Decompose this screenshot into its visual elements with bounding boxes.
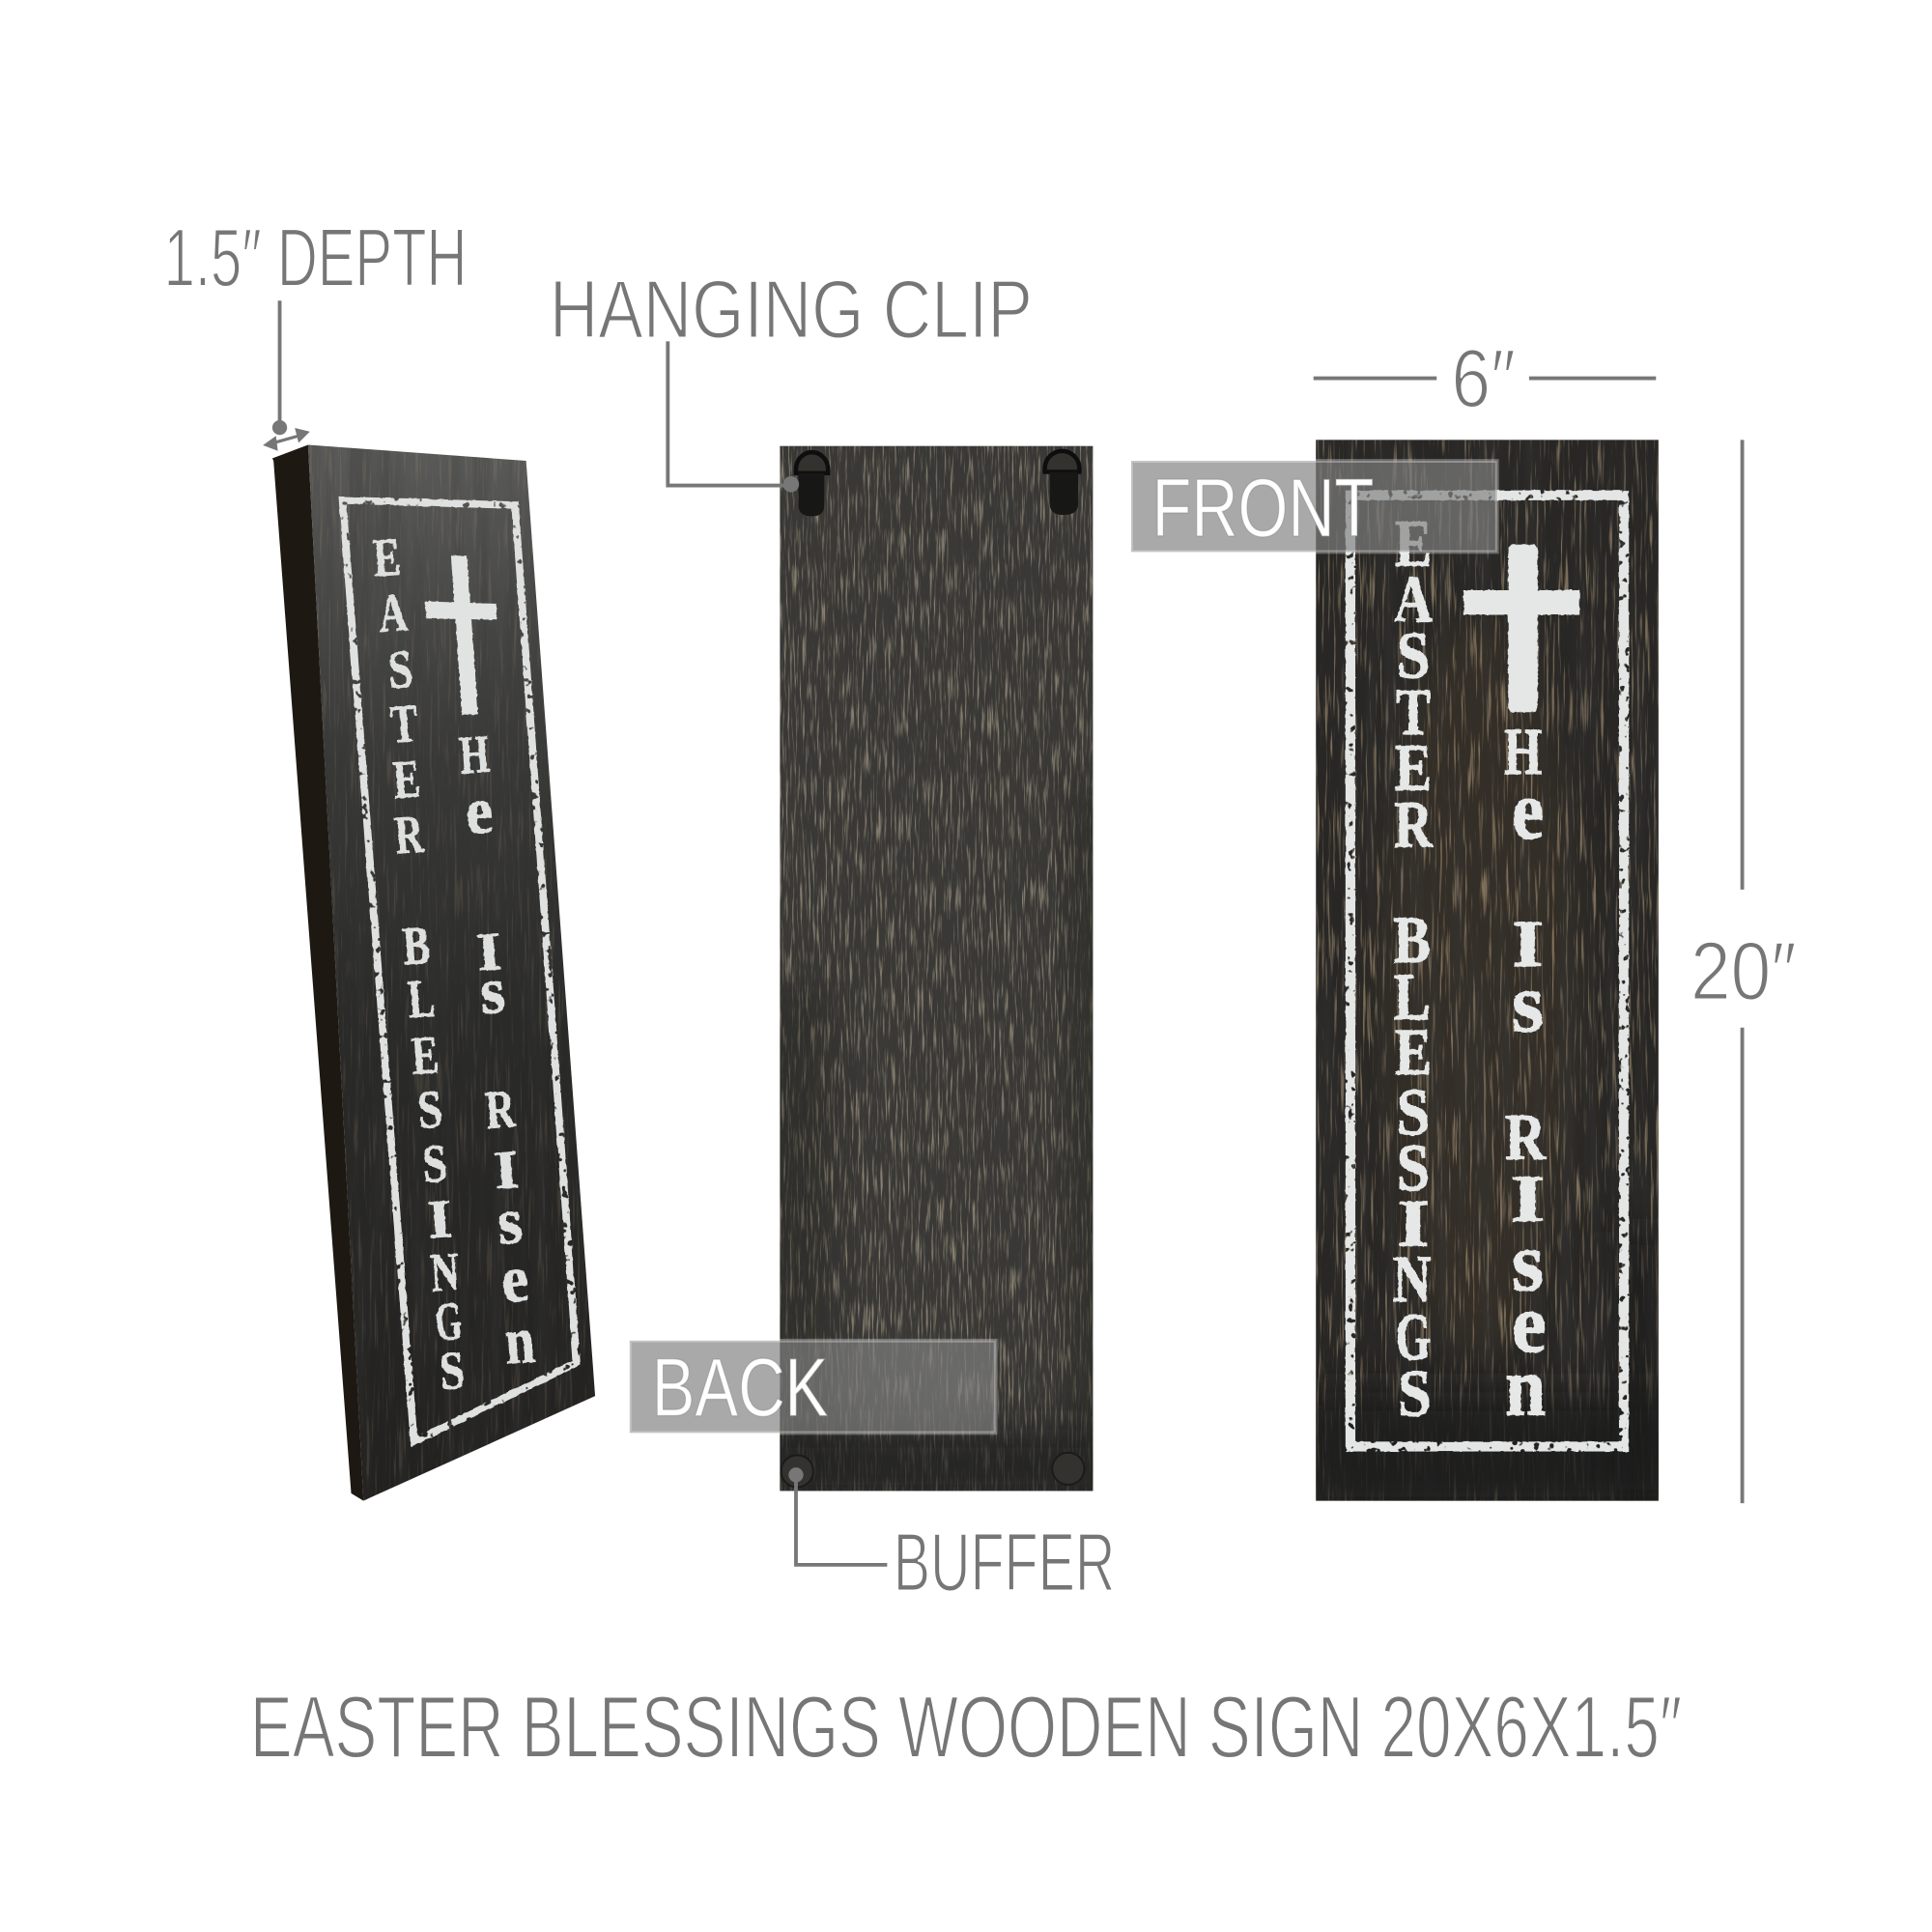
side view wood grain: [308, 444, 589, 1495]
side edge of board: [272, 444, 363, 1501]
side view text: He Is Risen: n: [502, 1303, 537, 1378]
side view text: Easter Blessings: R: [393, 805, 426, 867]
callout: 1.5 inch depth: [164, 213, 467, 448]
front text: Easter Blessings: T: [1396, 675, 1431, 749]
buffer leader: [796, 1476, 887, 1565]
height label: 20″: [1690, 925, 1797, 1017]
front text: Easter Blessings: S: [1397, 619, 1430, 693]
front text: Easter Blessings: B: [1394, 903, 1431, 977]
side view text: He Is Risen: I: [492, 1140, 521, 1201]
side view text: Easter Blessings: A: [377, 582, 410, 644]
side view text: Easter Blessings: E: [391, 749, 422, 810]
front text: Easter Blessings: E: [1395, 1015, 1432, 1089]
back wood grain: [780, 446, 1094, 1492]
front text: Easter Blessings: S: [1397, 1076, 1430, 1150]
side view text: Easter Blessings: S: [415, 1079, 444, 1141]
height line bottom: [1741, 1028, 1744, 1503]
front border: [1350, 496, 1624, 1446]
hanging clip dot: [783, 476, 799, 493]
front text: Easter Blessings: R: [1394, 787, 1434, 861]
width line left: [1314, 377, 1436, 380]
side view text: Easter Blessings: [371, 527, 467, 1402]
front text: Easter Blessings: A: [1394, 562, 1433, 636]
front text: He Is Risen: s: [1512, 1215, 1544, 1308]
back badge text: BACK: [652, 1343, 828, 1435]
side view text: Easter Blessings: S: [420, 1133, 449, 1195]
side view border: [343, 500, 577, 1441]
front cross: [1463, 545, 1579, 712]
front text: Easter Blessings: N: [1393, 1242, 1432, 1316]
side view face: [308, 444, 595, 1501]
side view text: Easter Blessings: L: [406, 968, 437, 1030]
side view text: He Is Risen: R: [483, 1079, 518, 1141]
panel: side view of sign: [272, 438, 604, 1509]
badge: BACK: [630, 1341, 996, 1435]
front text: He Is Risen: s: [1512, 957, 1544, 1050]
depth leader dot: [272, 420, 287, 435]
icon: right buffer: [1052, 1453, 1084, 1485]
front text: He Is Risen: e: [1512, 1277, 1547, 1370]
width line right: [1529, 377, 1656, 380]
side view text: He Is Risen: I: [475, 922, 503, 983]
panel: back view of sign: [780, 446, 1094, 1492]
front text: Easter Blessings: S: [1398, 1357, 1432, 1431]
side view text: Easter Blessings: S: [386, 639, 414, 701]
callout: buffer: [788, 1467, 1115, 1609]
side view text: Easter Blessings: E: [371, 527, 403, 589]
front text: Easter Blessings: I: [1397, 1187, 1430, 1261]
front text: He Is Risen: e: [1512, 763, 1544, 856]
front text: He Is Risen: I: [1511, 1162, 1545, 1236]
depth leader line: [278, 300, 281, 426]
badge: FRONT: [1131, 461, 1497, 554]
side view cross: [425, 555, 497, 715]
side view text: He Is Risen: s: [478, 953, 507, 1028]
depth double arrow: [267, 430, 307, 448]
callout: hanging clip: [550, 264, 1033, 493]
side view text: Easter Blessings: S: [438, 1341, 467, 1402]
front text: Easter Blessings: E: [1395, 731, 1432, 805]
front text: Easter Blessings: G: [1396, 1300, 1432, 1374]
front text: Easter Blessings: E: [1395, 506, 1432, 580]
width label: 6″: [1452, 333, 1516, 425]
panel: front view of sign: [1306, 440, 1676, 1516]
side view text: He Is Risen: H: [458, 724, 492, 786]
side view text: Easter Blessings: T: [388, 694, 420, 755]
front text: Easter Blessings: S: [1397, 1131, 1430, 1205]
side view text: Easter Blessings: I: [425, 1189, 454, 1250]
front badge text: FRONT: [1152, 463, 1374, 554]
depth label: 1.5″ DEPTH: [164, 213, 467, 304]
hanging clip label: HANGING CLIP: [550, 264, 1033, 355]
front text: He Is Risen: R: [1505, 1100, 1547, 1174]
front wood grain: [1306, 440, 1676, 1516]
front text: Easter Blessings: [1393, 506, 1434, 1431]
side view text: Easter Blessings: E: [410, 1025, 440, 1087]
side view text: He Is Risen: s: [495, 1183, 525, 1259]
buffer label: BUFFER: [894, 1518, 1115, 1609]
side view text: He Is Risen: e: [498, 1241, 530, 1317]
front board: [1316, 440, 1659, 1501]
side view text: Easter Blessings: B: [401, 916, 432, 977]
icon: right hanging clip: [1045, 451, 1079, 515]
icon: left buffer: [781, 1455, 813, 1488]
front text: He Is Risen: I: [1512, 907, 1544, 980]
side view text: He Is Risen: e: [463, 773, 495, 848]
buffer dot: [788, 1467, 804, 1482]
side view text: Easter Blessings: N: [429, 1242, 461, 1303]
front text: He Is Risen: n: [1505, 1340, 1546, 1433]
height line top: [1741, 440, 1744, 890]
hanging clip leader: [668, 341, 788, 486]
front text: He Is Risen: H: [1504, 715, 1542, 788]
back board: [780, 446, 1093, 1491]
side view text: He Is Risen: [458, 724, 537, 1378]
side view text: Easter Blessings: G: [433, 1292, 464, 1352]
back badge box: [630, 1341, 996, 1433]
front text: Easter Blessings: L: [1394, 960, 1431, 1034]
front text: He Is Risen: [1504, 715, 1547, 1433]
icon: left hanging clip: [796, 452, 828, 516]
front badge box: [1131, 461, 1497, 552]
